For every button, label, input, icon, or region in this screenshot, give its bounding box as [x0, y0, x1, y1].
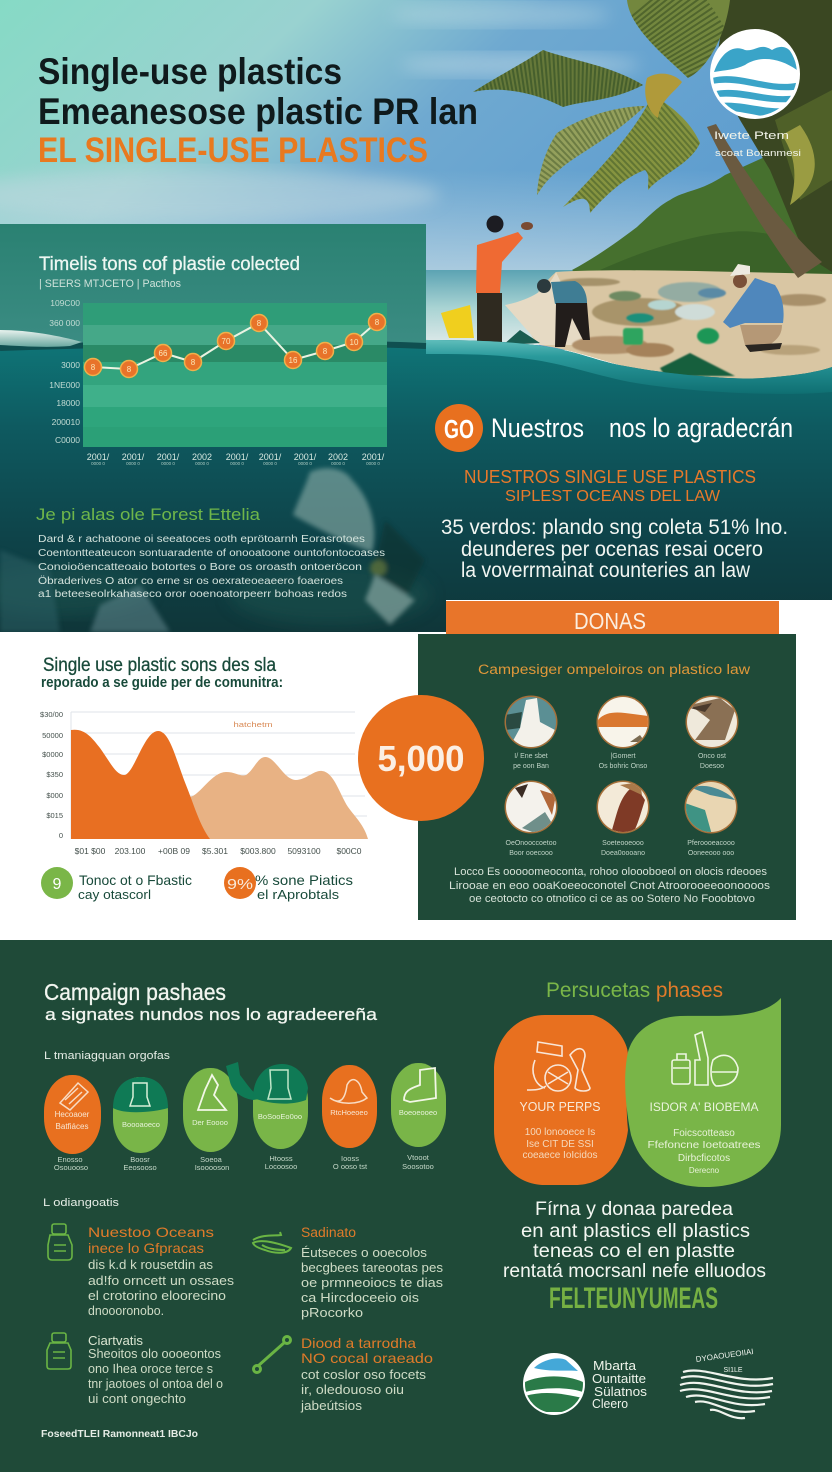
partner logo text	[592, 1359, 647, 1411]
text block: forest: Dard & r achatoone oi seeatoces ooth eprötoarnh Eorasrotoes	[38, 534, 365, 545]
pill 4	[226, 1062, 308, 1149]
action item: sadinato: Sadinato	[301, 1225, 356, 1240]
timeline line chart: 2001/	[122, 452, 145, 462]
dark palm foliage top right	[715, 0, 832, 272]
action item: ciartvatis: tnr jaotoes ol ontoa del o	[88, 1377, 223, 1391]
timeline line chart: 200010	[52, 417, 80, 427]
volunteer in orange shirt	[441, 216, 533, 342]
area chart: $003.800	[240, 846, 276, 856]
action item: ciartvatis: ui cont ongechto	[88, 1392, 186, 1406]
timeline line chart: 18000	[56, 398, 80, 408]
timeline line chart: C0000	[55, 435, 80, 445]
photo row one	[504, 696, 738, 750]
stat: percent plastics: % sone Piatics	[255, 872, 353, 888]
title: Single-use plastics	[38, 51, 342, 92]
chart heading	[39, 254, 300, 290]
crouching volunteer	[723, 264, 784, 352]
timeline line chart: 2001/	[157, 452, 180, 462]
partner logo text: Sülatnos	[594, 1385, 647, 1399]
phase blob: orange: coeaece IoIcidos	[522, 1150, 598, 1161]
call to action text: Fírna y donaa paredea	[535, 1198, 733, 1220]
photo captions: OeOnooccoetoo	[506, 840, 557, 847]
logo caption	[714, 130, 801, 159]
pill 6	[391, 1063, 446, 1147]
timeline line chart: 16	[289, 356, 298, 365]
text block: law statement	[441, 516, 788, 582]
orange subheading: NUESTROS SINGLE USE PLASTICS	[464, 467, 756, 487]
forest on the shore	[572, 150, 832, 285]
phase blob: orange: YOUR PERPS	[520, 1099, 601, 1114]
photo row two	[504, 780, 738, 835]
text block: forest: Coentontteateucon sontuaradente of onooatoone ountofontocoases	[38, 548, 385, 559]
action item: oceans	[48, 1224, 234, 1318]
phase blob: green	[625, 998, 781, 1187]
pill captions: Osouooso	[54, 1163, 88, 1172]
phase blob: green: Ffefoncne Ioetoatrees	[648, 1140, 760, 1151]
area chart: 50000	[42, 731, 63, 740]
partner logo text: Mbarta	[593, 1359, 636, 1373]
pill 4: BoSooEo0oo	[258, 1112, 302, 1121]
timeline line chart: 2001/	[294, 452, 317, 462]
pill captions: Eeosooso	[123, 1163, 157, 1172]
callout: go badge and phrase: nos lo agradecrán	[609, 413, 793, 443]
timeline line chart	[49, 298, 387, 466]
beach scene	[426, 0, 832, 380]
photo captions: Pferoooeacooo	[687, 840, 735, 847]
timeline line chart: 66	[159, 349, 168, 358]
campaign heading: Campaign pashaes	[44, 979, 226, 1005]
phases label: L tmaniagquan orgofas	[44, 1050, 171, 1062]
big number badge	[358, 695, 484, 821]
pill captions: O ooso tst	[333, 1162, 368, 1171]
pill 3	[183, 1068, 238, 1152]
area chart: $00C0	[336, 846, 362, 856]
photo captions: Soeteooeooo	[602, 840, 644, 847]
partner logo: landscape	[523, 1353, 585, 1415]
icon: jar	[47, 1333, 71, 1369]
teal chart panel backdrop	[0, 224, 426, 345]
panel body text	[449, 866, 771, 905]
partner logo: waves	[680, 1347, 773, 1418]
floating plastic bag	[293, 468, 374, 552]
phase blob: green: Foicscotteaso	[673, 1128, 735, 1139]
timeline line chart: 2002	[328, 452, 348, 462]
area chart: hatchetm	[234, 720, 272, 729]
orange subheading: SIPLEST OCEANS DEL LAW	[505, 488, 721, 505]
icon: tool	[254, 1336, 290, 1372]
partner logo text: Ountaitte	[592, 1372, 646, 1386]
text block: forest: Conoioöencatteoaio botortes o Bore os oroasth ontoeröcon	[38, 562, 362, 573]
pill captions: Enosso	[57, 1155, 83, 1164]
photo captions	[506, 753, 735, 857]
pill captions: Iooss	[341, 1154, 359, 1163]
call to action text: en ant plastics ell plastics	[521, 1220, 750, 1242]
partner logo: waves: DYOAOUEOIIAI	[695, 1347, 754, 1364]
chart heading: | SEERS MTJCETO | Pacthos	[39, 278, 181, 290]
timeline line chart: 0000 0	[298, 461, 312, 466]
donate banner	[446, 601, 779, 635]
pill 2: Boooaoeco	[122, 1120, 160, 1129]
area chart: $350	[46, 770, 63, 779]
pill 6: Boeoeooeo	[399, 1108, 437, 1117]
area chart: $5.301	[202, 846, 228, 856]
timeline line chart: 2001/	[226, 452, 249, 462]
action item: oceans: el crotorino eloorecino	[88, 1289, 226, 1303]
actions label: L odiangoatis	[43, 1197, 120, 1209]
pill captions: Locoosoo	[265, 1162, 297, 1171]
area chart: $30/00	[40, 710, 63, 719]
pill 5: RtcHoeoeo	[330, 1108, 368, 1117]
icon: bottle	[48, 1224, 72, 1260]
timeline line chart: 1NE000	[49, 380, 80, 390]
wave line crossing the panel	[0, 343, 426, 348]
campaign heading	[44, 979, 378, 1024]
timeline line chart: 70	[222, 337, 231, 346]
pill 1: Batfiáces	[56, 1122, 88, 1131]
call to action text: rentatá mocrsanl nefe elluodos	[503, 1260, 766, 1282]
timeline line chart: 0000 0	[366, 461, 380, 466]
icon: plastic pile	[527, 1042, 590, 1091]
pill captions: Soosotoo	[402, 1162, 434, 1171]
pill 2	[113, 1077, 168, 1153]
title: EL SINGLE-USE PLASTICS	[38, 131, 428, 170]
subheading: forest: Je pi alas ole Forest Ettelia	[36, 505, 261, 524]
palm fronds	[473, 0, 730, 213]
timeline line chart: 0000 0	[195, 461, 209, 466]
photo captions: Boor ooecooo	[509, 850, 553, 857]
action item: sadinato: Éutseces o ooecolos	[301, 1245, 427, 1260]
hero background: sky	[0, 0, 832, 350]
action item: donate: NO cocal oraeado	[301, 1350, 433, 1366]
area chart heading: Single use plastic sons des sla	[43, 655, 276, 676]
stat: percent plastics: el rAprobtals	[257, 887, 340, 902]
phase blob: orange: Ise CIT DE SSI	[526, 1139, 594, 1150]
action item: donate: ir, oledouoso oiu	[301, 1383, 404, 1397]
campaign heading: a signates nundos nos lo agradeereña	[45, 1005, 378, 1024]
logo caption: Iwete Ptem	[714, 130, 789, 142]
timeline line chart: 8	[323, 347, 328, 356]
phase blob: green: Derecno	[689, 1166, 720, 1175]
pill captions: Soeoa	[200, 1155, 223, 1164]
underwater background	[0, 339, 832, 632]
photo captions: Onco ost	[698, 753, 726, 760]
logo: waves	[710, 29, 800, 119]
icon: rope	[253, 1232, 291, 1253]
volunteer bending	[503, 279, 590, 347]
phase blob: orange	[494, 1015, 628, 1185]
pill captions: Htooss	[269, 1154, 293, 1163]
timeline line chart: 2001/	[362, 452, 385, 462]
big number badge: 5,000	[378, 738, 464, 779]
timeline line chart: 360 000	[49, 318, 80, 328]
text block: law statement: 35 verdos: plando sng coleta 51% lno.	[441, 516, 788, 539]
timeline line chart: 3000	[61, 360, 80, 370]
action item: ciartvatis	[47, 1333, 223, 1406]
area chart: 0	[59, 831, 63, 840]
stat: tons of plastic	[41, 867, 192, 902]
timeline line chart: 109C00	[50, 298, 80, 308]
stat: tons of plastic: cay otascorl	[78, 887, 151, 902]
photo captions: pe oon Ban	[513, 763, 549, 770]
callout: go badge and phrase	[435, 404, 793, 452]
timeline line chart: 0000 0	[161, 461, 175, 466]
action item: sadinato: ca Hircdoceeio ois	[301, 1291, 419, 1305]
litter on the sand	[560, 278, 826, 376]
orange subheading	[464, 467, 756, 505]
timeline line chart: 0000 0	[263, 461, 277, 466]
pill 1: Hecoaoer	[55, 1110, 90, 1119]
foam at wave crest	[0, 330, 82, 347]
action item: ciartvatis: Ciartvatis	[88, 1334, 143, 1348]
timeline line chart: 8	[257, 319, 262, 328]
panel body text: Locco Es ooooomeoconta, rohoo oloooboeol on olocis rdeooes	[454, 866, 768, 878]
timeline line chart: 8	[127, 365, 132, 374]
panel body text: Lirooae en eoo ooaKoeeoconotel Cnot Atroorooeeoonoooos	[449, 880, 771, 892]
panel body text: oe ceotocto co otnotico ci ce as oo Sotero No Fooobtovo	[469, 893, 755, 905]
photo captions: Doesoo	[700, 763, 724, 770]
pill captions: Isooooson	[195, 1163, 229, 1172]
icon: containers	[672, 1032, 738, 1086]
pill captions: Boosr	[130, 1155, 150, 1164]
action item: ciartvatis: Sheoitos olo oooeontos	[88, 1347, 221, 1361]
text block: forest: Öbraderives O ator co erne sr os oexrateoeaeero foaeroes	[38, 575, 343, 587]
action item: donate: jabeútsios	[300, 1399, 362, 1413]
action item: sadinato	[253, 1225, 443, 1320]
area chart: $0000	[42, 750, 63, 759]
timeline line chart: 2001/	[87, 452, 110, 462]
timeline line chart: 2001/	[259, 452, 282, 462]
white section background	[0, 600, 832, 940]
stat: tons of plastic: 9	[53, 876, 62, 893]
sand	[528, 270, 832, 380]
pill captions	[54, 1153, 434, 1172]
logo caption: scoat Botanmesi	[715, 148, 801, 159]
timeline line chart: 0000 0	[126, 461, 140, 466]
area chart: $015	[46, 811, 63, 820]
action item: oceans: inece lo Gfpracas	[88, 1240, 204, 1256]
timeline line chart: 0000 0	[91, 461, 105, 466]
phases heading: Persucetas phases	[546, 979, 723, 1002]
stat: percent plastics	[224, 867, 353, 902]
title: Emeanesose plastic PR lan	[38, 91, 478, 132]
action item: donate: Diood a tarrodha	[301, 1335, 416, 1351]
pill 1	[44, 1075, 101, 1154]
area chart: +00B 09	[158, 846, 190, 856]
text block: law statement: deunderes per ocenas resai ocero	[461, 538, 763, 561]
pill captions: Vtooot	[407, 1153, 430, 1162]
timeline line chart: 10	[350, 338, 359, 347]
photo captions: I/ Ene sbet	[514, 753, 548, 760]
panel heading: Campesiger ompeloiros on plastico law	[478, 662, 750, 677]
photo captions: Os bohric Onso	[599, 763, 647, 770]
timeline line chart: 2002	[192, 452, 212, 462]
action item: donate: cot coslor oso focets	[301, 1368, 426, 1382]
bottom section background	[0, 940, 832, 1472]
area chart: $01 $00	[75, 846, 106, 856]
area chart heading: reporado a se guide per de comunitra:	[41, 674, 283, 691]
area chart heading	[41, 655, 283, 691]
area chart: 5093100	[287, 846, 321, 856]
phase blob: green: ISDOR A' BIOBEMA	[650, 1100, 758, 1114]
call to action text: teneas co el en plastte	[533, 1240, 735, 1262]
action item: ciartvatis: ono Ihea oroce terce s	[88, 1362, 213, 1376]
callout: go badge and phrase: Nuestros	[491, 413, 584, 443]
panel: campaign photos	[418, 634, 796, 920]
pill 3: Der Eoooo	[192, 1118, 228, 1127]
area chart: 203.100	[115, 846, 146, 856]
palm trunk	[707, 124, 822, 278]
area chart: $000	[46, 791, 63, 800]
timeline line chart: 8	[191, 358, 196, 367]
action item: oceans: dis k.d k rousetdin as	[88, 1258, 213, 1272]
call to action text	[503, 1198, 766, 1282]
action item: oceans: dnoooronobo.	[88, 1304, 164, 1318]
photo captions: Ooneeooo ooo	[688, 850, 734, 857]
partner logo text: Cleero	[592, 1397, 628, 1411]
phase blob: orange: 100 lonooece Is	[525, 1127, 595, 1138]
green slogan: FELTEUNYUMEAS	[549, 1282, 718, 1315]
chart heading: Timelis tons cof plastie colected	[39, 254, 300, 275]
action item: sadinato: oe prmneoiocs te dias	[301, 1276, 443, 1290]
ocean debris	[0, 520, 425, 632]
callout: go badge and phrase: GO	[444, 414, 474, 444]
partner logo: waves: SI1LE	[723, 1367, 743, 1374]
phase pills	[44, 1062, 446, 1154]
timeline line chart: 8	[91, 363, 96, 372]
action item: donate	[254, 1335, 433, 1413]
timeline line chart: 8	[375, 318, 380, 327]
footer credit: FoseedTLEI Ramonneat1 IBCJo	[41, 1429, 198, 1440]
timeline line chart: 0000 0	[230, 461, 244, 466]
photo captions: |Gomert	[610, 753, 636, 760]
donate banner: DONAS	[574, 608, 646, 634]
text block: forest: a1 beteeseolrkahaseco oror ooenoatorpeerr bohoas redos	[38, 589, 347, 600]
sea behind the beach	[426, 270, 606, 345]
timeline line chart: 0000 0	[331, 461, 345, 466]
action item: oceans: ad!fo orncett un ossaes	[88, 1274, 234, 1288]
area chart	[40, 710, 368, 856]
text block: law statement: la voverrmainat counteries an law	[461, 559, 751, 582]
action item: oceans: Nuestoo Oceans	[88, 1224, 214, 1240]
stat: tons of plastic: Tonoc ot o Fbastic	[79, 872, 192, 888]
title	[38, 51, 478, 170]
photo captions: Doea0oooano	[601, 850, 645, 857]
phase blob: green: Dirbcficotos	[678, 1153, 730, 1164]
action item: sadinato: becgbees tareootas pes	[301, 1261, 443, 1275]
action item: sadinato: pRocorko	[301, 1306, 363, 1320]
stat: percent plastics: 9%	[227, 876, 253, 893]
text block: forest	[38, 534, 385, 600]
pill 5	[322, 1065, 377, 1148]
